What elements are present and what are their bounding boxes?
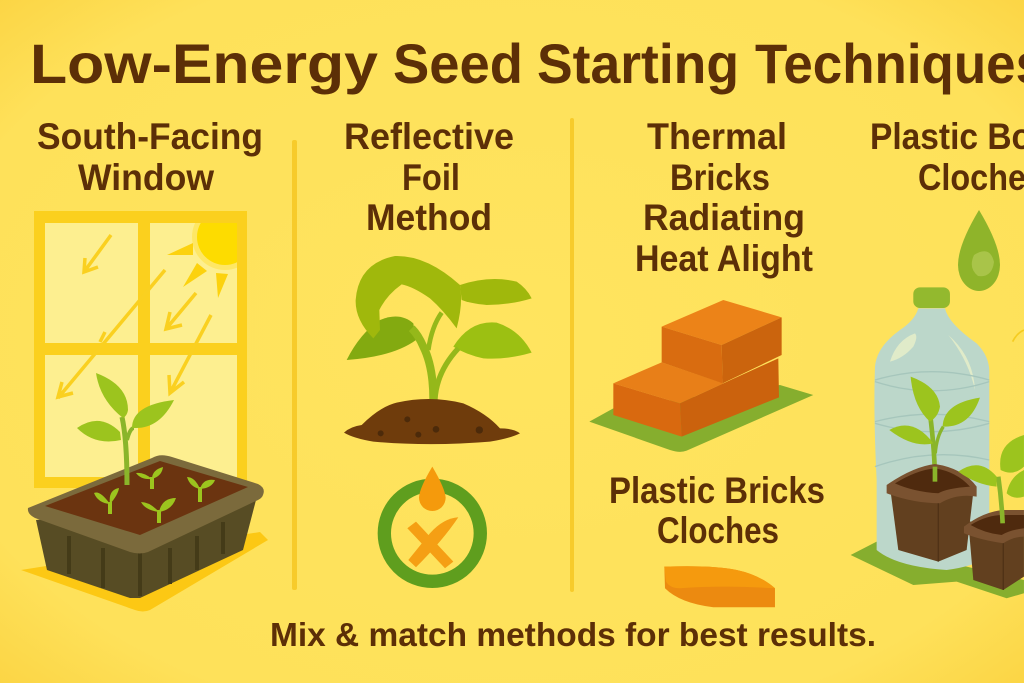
footer caption: Mix & match methods for best results. xyxy=(270,616,876,653)
heading: south-facing window: Window xyxy=(78,157,214,198)
heading: thermal bricks radiating heat alight xyxy=(635,116,813,279)
heading: reflective foil method: Method xyxy=(366,197,492,238)
panel: reflective foil method xyxy=(344,116,532,581)
heading: thermal bricks radiating heat alight: Bricks xyxy=(670,157,770,198)
icon: bottle with plants xyxy=(851,287,1024,598)
icon: water drop xyxy=(958,210,1000,291)
panel: plastic bottle cloche xyxy=(851,116,1024,598)
heading: plastic bricks cloches: Plastic Bricks xyxy=(609,470,825,511)
title: Starting xyxy=(537,32,739,95)
icon: window with sun xyxy=(34,204,258,488)
heading: south-facing window: South-Facing xyxy=(37,116,263,157)
panel: thermal bricks xyxy=(589,116,825,607)
heading: south-facing window xyxy=(37,116,263,198)
icon: stacked bricks xyxy=(589,300,813,452)
heading: thermal bricks radiating heat alight: Thermal xyxy=(647,116,787,157)
heading: thermal bricks radiating heat alight: Radiating xyxy=(643,197,805,238)
title: Low-Energy xyxy=(30,32,378,95)
heading: reflective foil method: Reflective xyxy=(344,116,514,157)
icon: seedling in soil xyxy=(344,256,532,444)
heading: reflective foil method: Foil xyxy=(402,157,460,198)
title xyxy=(30,32,1024,95)
title: Seed xyxy=(393,32,523,95)
heading: plastic bottle cloche xyxy=(870,116,1024,198)
heading: plastic bricks cloches xyxy=(609,470,825,551)
icon: seedling tray xyxy=(21,373,268,612)
heading: reflective foil method xyxy=(344,116,514,238)
panel: south-facing window xyxy=(21,116,268,612)
heading: thermal bricks radiating heat alight: Heat Alight xyxy=(635,238,813,279)
icon: crossed circle with drop xyxy=(384,467,480,581)
icon: orange brick xyxy=(664,566,775,607)
heading: plastic bricks cloches: Cloches xyxy=(657,510,779,551)
